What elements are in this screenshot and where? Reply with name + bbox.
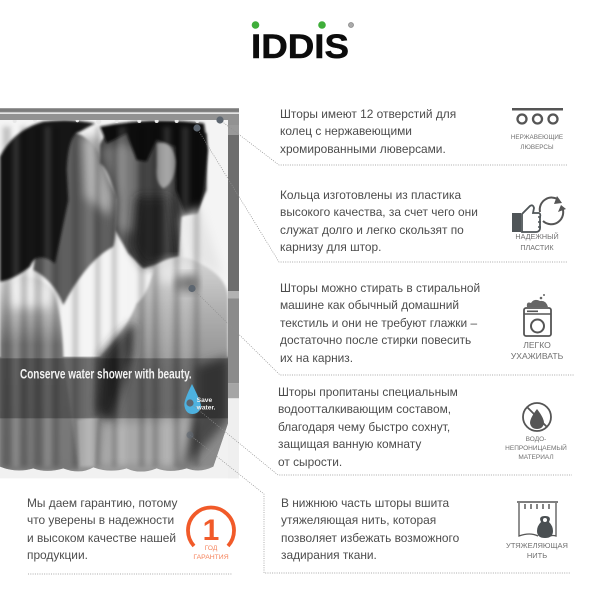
text: water repellent: защищая ванную комнату (278, 437, 421, 451)
text: weighted thread: утяжеляющая нить, которая (281, 513, 436, 527)
photo: shower curtain with kissing couple: Save (197, 397, 213, 404)
text: weighted thread: задирания ткани. (281, 548, 377, 562)
text: washing: достаточно после стирки повесить (280, 333, 471, 347)
text: guarantee: и высоком качестве нашей (27, 531, 176, 545)
text: washing: машине как обычный домашний (280, 298, 459, 312)
text: eyelets: хромированными люверсами. (280, 142, 446, 156)
text: weighted thread: В нижнюю часть шторы вшита (281, 496, 449, 510)
vertical curtain folds (3, 127, 199, 467)
text: eyelets: Шторы имеют 12 отверстий для (280, 107, 456, 121)
text: weighted thread (281, 496, 459, 562)
text: rings: карнизу для штор. (280, 240, 381, 254)
dark text band (0, 358, 228, 418)
slogan on curtain: Conserve water shower with beauty. (20, 367, 192, 382)
icon: one year guarantee: ГОД (205, 545, 218, 552)
label: waterproof material: МАТЕРИАЛ (518, 454, 554, 461)
text: washing: текстиль и они не требуют глажки – (280, 316, 477, 330)
text: rings: служат долго и легко скользят по (280, 223, 464, 237)
text: water repellent: благодаря чему быстро сохнут, (278, 420, 450, 434)
text: washing: Шторы можно стирать в стиральной (280, 281, 480, 295)
icon: one year guarantee: 1 (203, 514, 219, 547)
label: waterproof material (505, 436, 567, 461)
text: eyelets (280, 107, 456, 156)
right figure: shoulder, arm and back (100, 257, 228, 467)
label: weighted thread (506, 541, 568, 560)
label: weighted thread: УТЯЖЕЛЯЮЩАЯ (506, 541, 568, 550)
label: easy care: ЛЕГКО (523, 340, 551, 350)
text: guarantee: что уверены в надежности (27, 513, 174, 527)
curtain eyelets (13, 120, 200, 124)
text: water repellent (278, 385, 458, 469)
text: weighted thread: позволяет избежать возможного (281, 531, 459, 545)
left figure: hair (0, 120, 95, 282)
label: easy care: УХАЖИВАТЬ (511, 351, 563, 361)
text: guarantee: Мы даем гарантию, потому (27, 496, 177, 510)
save water drop (184, 384, 201, 414)
text: rings: Кольца изготовлены из пластика (280, 188, 461, 202)
left figure: face (33, 132, 117, 305)
text: rings (280, 188, 478, 254)
label: eyelets: НЕРЖАВЕЮЩИЕ (511, 134, 563, 141)
text: water repellent: Шторы пропитаны специальным (278, 385, 458, 399)
left figure: shoulder and arm (0, 277, 78, 470)
text: guarantee (27, 496, 178, 562)
text: washing (280, 281, 480, 365)
right figure: hair (100, 121, 208, 214)
text: eyelets: колец с нержавеющими (280, 124, 412, 138)
label: weighted thread: НИТЬ (527, 551, 547, 560)
label: durable plastic (515, 232, 559, 252)
label: easy care (511, 340, 563, 361)
photo: shower curtain with kissing couple: water. (196, 404, 216, 411)
label: durable plastic: ПЛАСТИК (520, 242, 554, 252)
text: guarantee: продукции. (27, 548, 88, 562)
text: washing: их на карниз. (280, 351, 353, 365)
icon: one year guarantee: ГАРАНТИЯ (193, 554, 229, 561)
label: eyelets (511, 134, 563, 150)
label: waterproof material: НЕПРОНИЦАЕМЫЙ (505, 445, 567, 452)
text: water repellent: водоотталкивающим составом, (278, 402, 451, 416)
right figure: ear (156, 143, 176, 188)
label: waterproof material: ВОДО- (526, 436, 546, 443)
photo: shower curtain with kissing couple (0, 108, 239, 478)
label: durable plastic: НАДЕЖНЫЙ (515, 232, 559, 241)
logo: IDDIS (251, 28, 349, 66)
text: rings: высокого качества, за счет чего они (280, 205, 478, 219)
text: water repellent: от сырости. (278, 455, 342, 469)
label: eyelets: ЛЮВЕРСЫ (520, 144, 554, 150)
right figure: head and neck (100, 123, 207, 268)
